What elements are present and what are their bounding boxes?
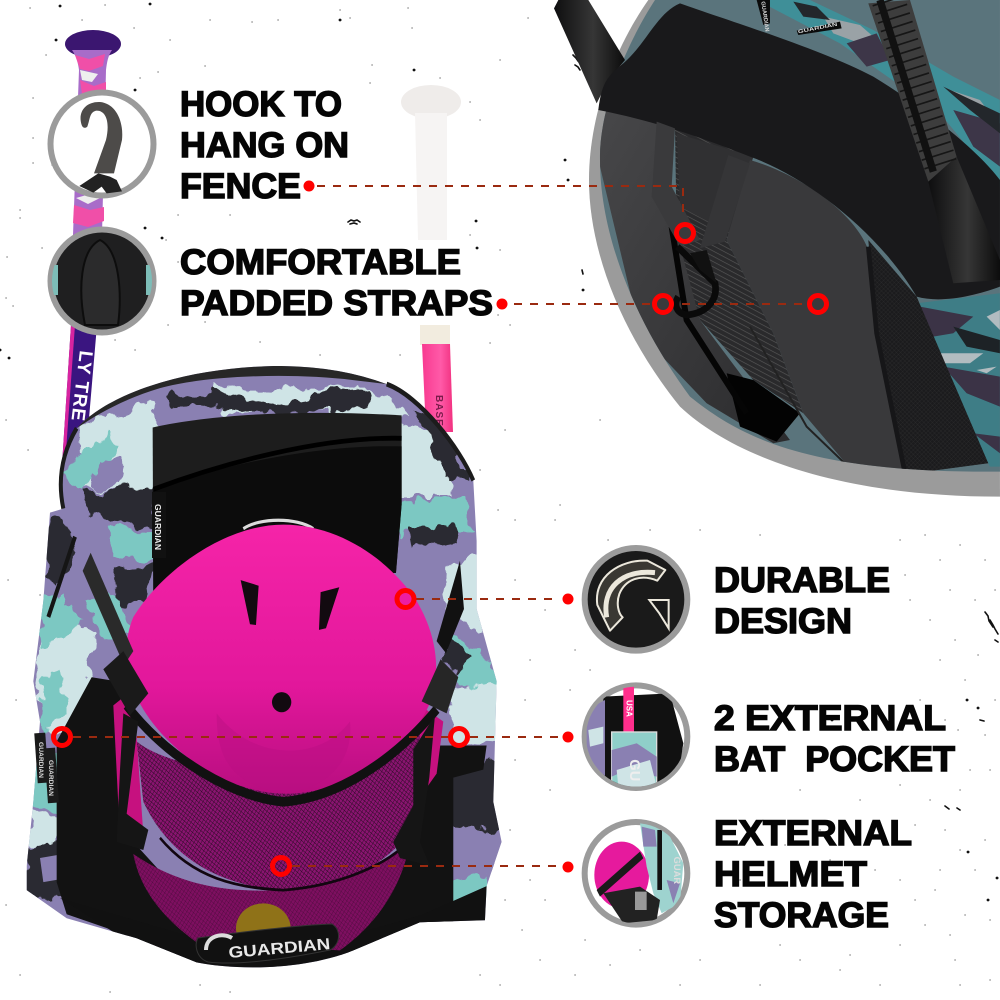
right pad [727,160,903,473]
mesh pocket back [137,733,420,890]
right bat [928,157,1000,283]
heading: hook to hang on fence: HANG ON [180,125,349,165]
left pad [600,110,790,443]
zipper tags [757,0,842,35]
side zipper tags: GUARDIAN [37,742,44,778]
white and pink bat: BASE [433,395,444,427]
heading: 2 external bat pocket: 2 EXTERNAL [714,698,946,738]
front black panel [153,413,402,593]
helmet crest [597,561,665,631]
heading: external helmet storage: EXTERNAL [714,813,912,853]
heading: hook to hang on fence [180,84,349,206]
logo patch [236,903,291,953]
pink barrel [422,344,453,432]
icon: bat pocket [585,685,687,788]
heading: comfortable padded straps: COMFORTABLE [180,242,461,282]
zipper tag [152,492,166,558]
zoomed back view panel [554,0,1000,497]
side zipper tags: GUARDIAN [47,760,54,796]
helmet rim [243,520,313,529]
callout line: straps [496,296,826,312]
icon: guardian logo [585,548,687,651]
icon: helmet storage: GUAR [672,857,682,884]
heading: durable design: DURABLE [714,560,890,600]
white grip [415,113,447,240]
collar [420,325,450,345]
heading: external helmet storage: HELMET [714,854,867,894]
heading: durable design [714,560,890,641]
zoomed back view panel: GUARDIAN [759,1,770,32]
top rim [61,384,473,509]
icon: padded straps [50,230,154,332]
heading: hook to hang on fence: FENCE [180,166,301,206]
metal hook [676,247,716,315]
cheek guard [649,600,669,628]
lower black strap [727,373,800,442]
icon: helmet storage [585,822,687,925]
barrel [62,325,97,465]
helmet chin shading [217,713,350,793]
side mesh [868,240,988,473]
helmet [126,525,436,794]
purple bat behind backpack: LY TRE [66,349,96,423]
teal backdrop [600,0,1000,472]
dark top edge [77,360,387,428]
brand badge: GUARDIAN [228,936,331,962]
lower mesh pocket [133,842,410,950]
heading: durable design: DESIGN [714,601,852,641]
camo top strip [757,0,1000,187]
side zipper tags [34,733,59,803]
grip tape [72,50,112,235]
ribbed strap [675,127,803,413]
gray ring [589,0,1000,497]
knob [65,30,121,58]
zipper [153,438,402,489]
brand badge [196,924,339,963]
seam [668,227,732,396]
straps and buckles [83,553,133,665]
white and pink bat [401,85,461,432]
heading: hook to hang on fence: HOOK TO [180,84,342,124]
camo lower right [917,293,1000,467]
heading: 2 external bat pocket: BAT POCKET [714,739,955,779]
callout line: hook [304,180,694,242]
backpack [20,360,520,990]
side piping [48,537,75,617]
heading: comfortable padded straps: PADDED STRAPS [180,283,493,323]
zoomed back view panel: GUARDIAN [798,22,839,35]
white knob [401,85,461,119]
icon: bat pocket: GU [626,759,642,781]
callout line: durable [397,590,574,608]
helmet vents [241,580,339,630]
elastic cord [127,705,437,802]
black side pockets and base [57,677,207,970]
heading: comfortable padded straps [180,242,493,323]
strap loops [652,122,700,247]
heading: 2 external bat pocket [714,698,955,779]
left bat [554,0,625,103]
zipper tag: GUARDIAN [153,504,163,550]
camo body [20,360,520,990]
helmet lower left [113,689,143,838]
icon: bat pocket: USA [624,700,633,717]
flap [598,3,1000,299]
heading: external helmet storage: STORAGE [714,895,889,935]
heading: external helmet storage [714,813,912,935]
callout line: bat pockets [54,728,574,746]
callout line: helmet storage [272,858,574,874]
purple bat behind backpack [62,30,121,465]
icon: hook to hang on fence [50,92,154,196]
